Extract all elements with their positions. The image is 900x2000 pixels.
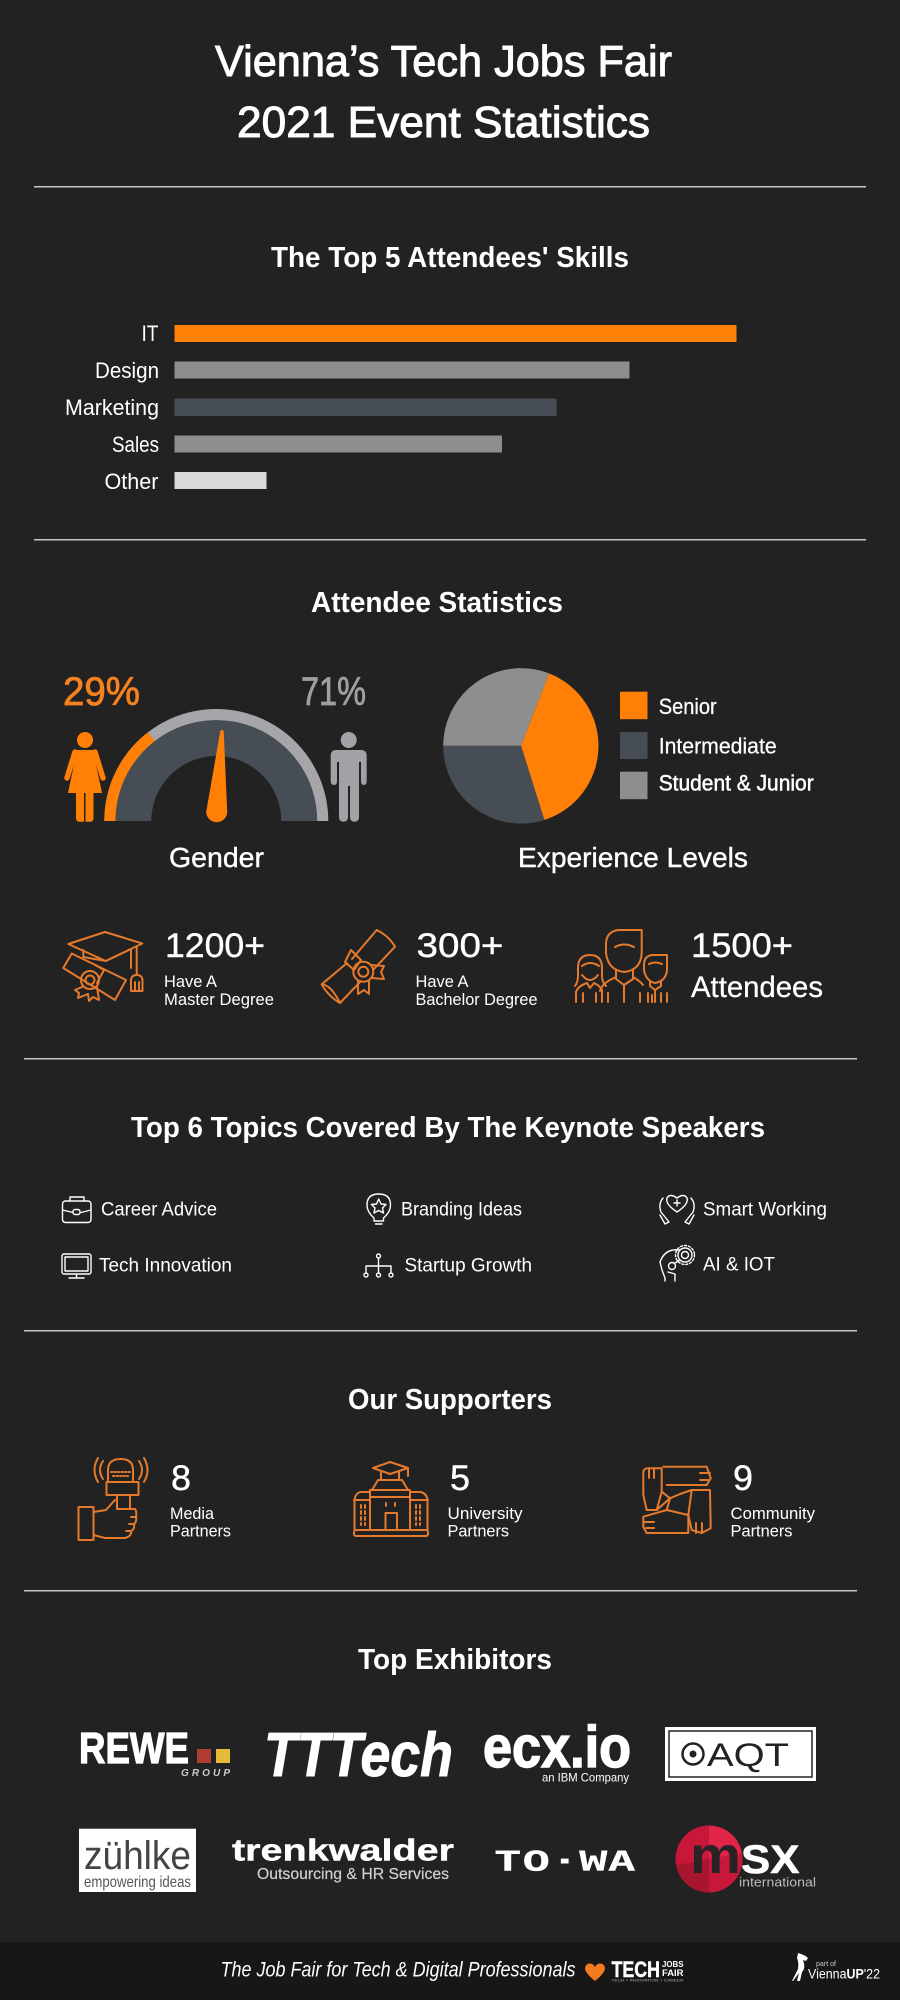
icon: university building bbox=[354, 1462, 428, 1536]
logo: REWE Group: REWE bbox=[79, 1724, 189, 1773]
logo: AQT bbox=[665, 1727, 816, 1781]
icon: diploma bbox=[322, 930, 395, 1003]
logo: trenkwalder: trenkwalder bbox=[232, 1832, 454, 1868]
stat: master degree bbox=[63, 927, 274, 1009]
stat: bachelor degree bbox=[322, 927, 538, 1009]
supporter: university partners: University bbox=[448, 1504, 523, 1523]
heading: keynote topics: Top 6 Topics Covered By The Keynote Speakers bbox=[131, 1112, 765, 1144]
logo: MSX international: m bbox=[690, 1827, 741, 1885]
logo: TO-WA: TO·WA bbox=[494, 1844, 636, 1878]
icon: monitor bbox=[62, 1254, 91, 1278]
topic: AI and IOT bbox=[660, 1246, 775, 1281]
stat text: 1500+ bbox=[691, 927, 793, 965]
pie chart: experience levels bbox=[443, 668, 814, 873]
icon: briefcase bbox=[62, 1197, 91, 1222]
gender gauge bbox=[63, 670, 367, 873]
logo: MSX international: international bbox=[739, 1874, 816, 1890]
supporter: university partners bbox=[354, 1459, 523, 1540]
supporter: community partners: Partners bbox=[730, 1522, 792, 1540]
supporter text: 9 bbox=[733, 1459, 753, 1498]
stat: bachelor degree: Bachelor Degree bbox=[416, 990, 538, 1009]
logo: ViennaUP 22: part of bbox=[816, 1959, 837, 1968]
legend: Student & Junior bbox=[659, 771, 814, 796]
logo: ViennaUP 22: ViennaUP'22 bbox=[808, 1966, 880, 1982]
supporter: community partners: Community bbox=[730, 1504, 815, 1523]
icon: man bbox=[331, 732, 367, 822]
title bbox=[215, 37, 672, 147]
logo: trenkwalder bbox=[232, 1832, 454, 1883]
icon: org tree bbox=[364, 1254, 393, 1277]
logo: zuhlke: zühlke bbox=[84, 1834, 191, 1878]
heading: our supporters: Our Supporters bbox=[348, 1384, 552, 1416]
supporter: media partners: Partners bbox=[170, 1522, 231, 1540]
logo: Tech Jobs Fair: FAIR bbox=[662, 1968, 684, 1978]
title: 2021 Event Statistics bbox=[237, 98, 650, 147]
gender gauge: 29% bbox=[63, 670, 140, 714]
tagline: The Job Fair for Tech & Digital Professionals bbox=[220, 1958, 576, 1982]
topic: branding ideas: Branding Ideas bbox=[401, 1198, 522, 1220]
logo: Tech Jobs Fair: JOBS bbox=[662, 1960, 684, 1969]
footer band bbox=[0, 1942, 900, 2000]
supporter: university partners: Partners bbox=[448, 1522, 509, 1540]
logo: Tech Jobs Fair: TECH + INNOVATION + CAREER bbox=[612, 1978, 684, 1982]
supporter: media partners bbox=[78, 1458, 231, 1540]
label: experience levels: Experience Levels bbox=[518, 842, 748, 873]
stat: bachelor degree: Have A bbox=[416, 972, 469, 991]
logo: ecx.io: ecx.io bbox=[483, 1715, 631, 1780]
logo: MSX international bbox=[676, 1826, 816, 1892]
stat text: 1200+ bbox=[165, 927, 265, 965]
panel: keynote topics bbox=[62, 1112, 827, 1281]
icon: hands holding heart bbox=[660, 1196, 694, 1224]
icon: group of people bbox=[575, 930, 667, 1002]
icon: head with gears bbox=[660, 1246, 694, 1281]
topic: startup growth: Startup Growth bbox=[404, 1254, 532, 1276]
topic: AI and IOT: AI & IOT bbox=[703, 1254, 775, 1276]
legend: Intermediate bbox=[659, 733, 777, 758]
title: Vienna’s Tech Jobs Fair bbox=[215, 37, 672, 86]
topic: career advice bbox=[62, 1197, 217, 1222]
stat text: 300+ bbox=[416, 927, 504, 965]
icon: four interlocked hands bbox=[643, 1467, 711, 1533]
logo: trenkwalder: Outsourcing & HR Services bbox=[257, 1866, 449, 1883]
supporter text: 5 bbox=[450, 1459, 470, 1498]
panel: supporters bbox=[78, 1384, 815, 1540]
logo: MSX international: SX bbox=[741, 1838, 800, 1882]
legend bbox=[620, 692, 814, 799]
stat: master degree: Have A bbox=[164, 972, 218, 991]
heading: attendee statistics: Attendee Statistics bbox=[311, 587, 563, 619]
stat: attendees bbox=[575, 927, 823, 1004]
topic: career advice: Career Advice bbox=[101, 1198, 217, 1220]
icon: hand holding microphone bbox=[78, 1458, 148, 1540]
icon: woman bbox=[67, 732, 103, 822]
logo: Tech Jobs Fair: TECH bbox=[612, 1957, 660, 1982]
topic: tech innovation: Tech Innovation bbox=[99, 1254, 232, 1276]
stat: attendees: Attendees bbox=[691, 971, 823, 1004]
bar chart: skills: IT bbox=[142, 321, 158, 346]
supporter: media partners: Media bbox=[170, 1504, 215, 1523]
logo: ecx.io: an IBM Company bbox=[542, 1770, 629, 1784]
topic: smart working: Smart Working bbox=[703, 1198, 827, 1220]
legend: Senior bbox=[659, 694, 717, 719]
heading: skills: The Top 5 Attendees' Skills bbox=[271, 242, 629, 274]
stat: master degree: Master Degree bbox=[164, 990, 274, 1009]
panel: top skills bbox=[65, 242, 736, 494]
supporter text: 8 bbox=[171, 1459, 191, 1498]
bar chart: skills: Sales bbox=[112, 432, 159, 457]
logo: ViennaUP 22 bbox=[792, 1953, 880, 1982]
label: gender: Gender bbox=[169, 842, 264, 873]
topic: branding ideas bbox=[367, 1194, 522, 1224]
panel: top exhibitors bbox=[79, 1644, 816, 1892]
supporter: community partners bbox=[643, 1459, 815, 1540]
bar chart: skills: Marketing bbox=[65, 395, 159, 420]
icon: graduation cap and diploma bbox=[63, 932, 142, 1001]
logo: AQT: AQT bbox=[707, 1737, 789, 1773]
logo: TTTech: TTTech bbox=[264, 1721, 453, 1790]
gender gauge: 71% bbox=[301, 670, 366, 714]
bar chart: skills: Design bbox=[95, 358, 159, 383]
icon: light bulb with star bbox=[367, 1194, 390, 1224]
bar chart: skills bbox=[65, 321, 736, 494]
heading: top exhibitors: Top Exhibitors bbox=[358, 1644, 552, 1676]
logo: zuhlke bbox=[79, 1829, 196, 1892]
panel: attendee statistics bbox=[63, 587, 823, 1009]
topic: smart working bbox=[660, 1196, 827, 1224]
logo: REWE Group: GROUP bbox=[181, 1768, 230, 1779]
icon: heart bbox=[585, 1963, 605, 1981]
bar chart: skills: Other bbox=[104, 469, 158, 494]
logo: zuhlke: empowering ideas bbox=[84, 1874, 191, 1891]
